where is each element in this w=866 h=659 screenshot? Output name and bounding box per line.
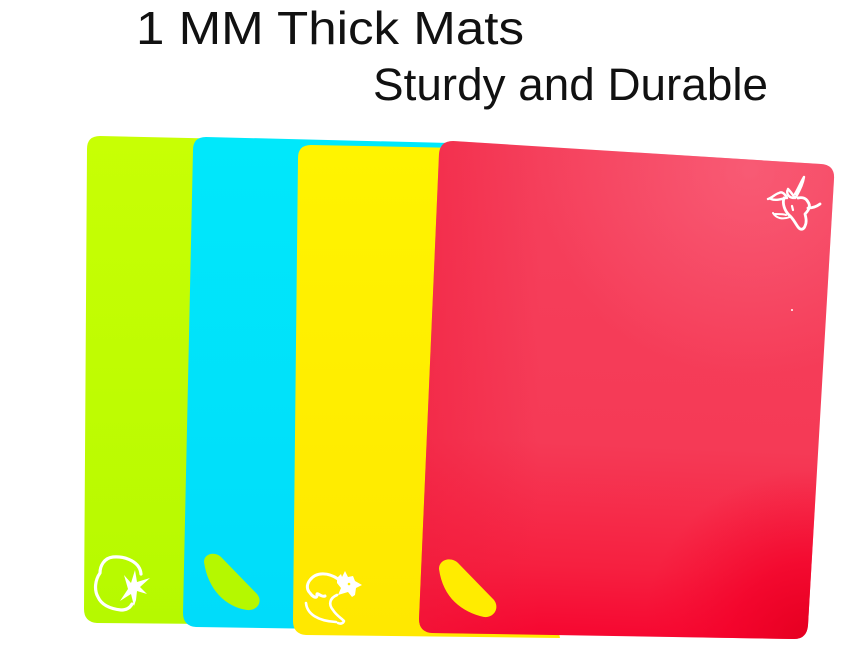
mark on red mat [791, 309, 793, 311]
icon: tomato [96, 557, 150, 610]
icon: yellow handle cutout [439, 559, 496, 617]
icon: green handle cutout [204, 554, 260, 610]
icon: chicken [306, 571, 362, 624]
panel: blue mat [183, 137, 450, 631]
panel: red mat [419, 141, 834, 639]
subtitle: Sturdy and Durable: Sturdy and Durable [373, 59, 768, 110]
icon: cow head [768, 177, 820, 229]
panel: green mat [84, 136, 450, 626]
panel: yellow mat [293, 145, 560, 638]
title: 1 MM Thick Mats: 1 MM Thick Mats [136, 2, 524, 54]
